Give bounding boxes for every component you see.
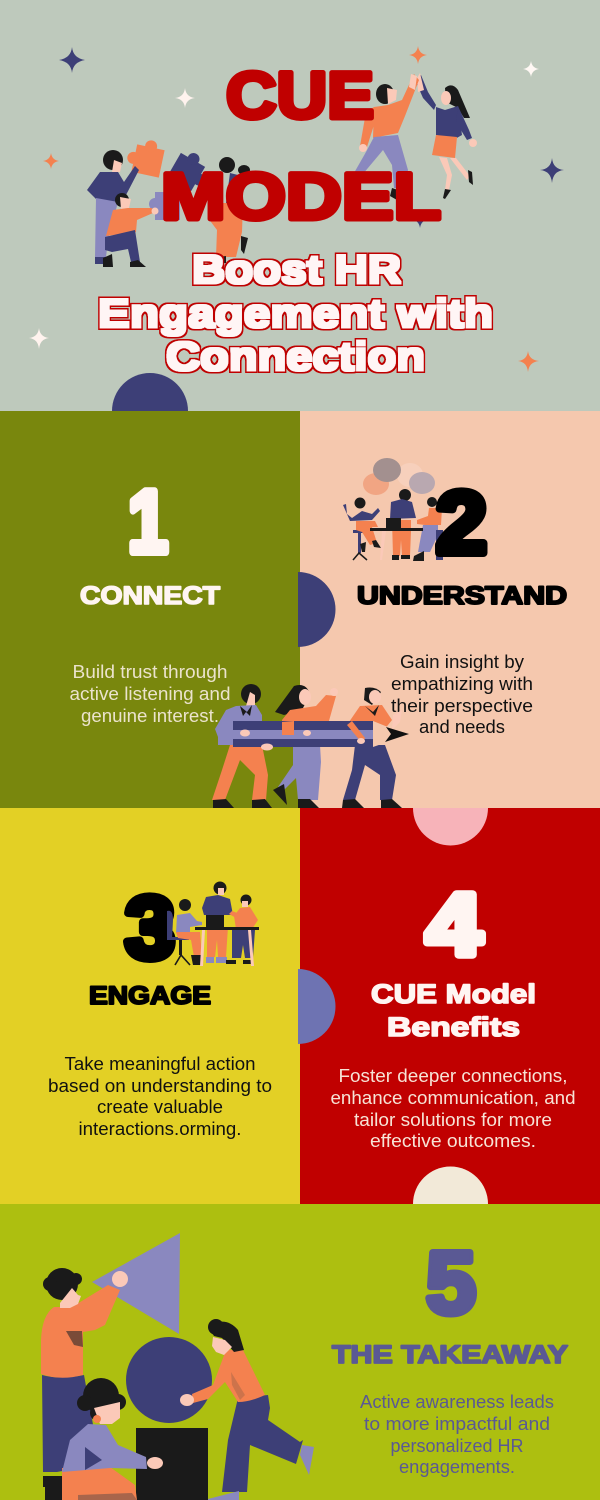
body: takeaway: personalized HR — [390, 1436, 524, 1456]
semicircle: purple divider — [298, 969, 336, 1044]
number 5: 5 — [426, 1233, 476, 1332]
semicircle: pink — [413, 808, 488, 846]
body: engage: interactions.orming. — [78, 1119, 242, 1139]
illustration: people with shapes — [41, 1233, 314, 1500]
illustration: desk meeting — [167, 882, 259, 966]
body: takeaway: to more impactful and — [364, 1414, 550, 1434]
illustration: high five — [350, 73, 477, 200]
heading: understand: UNDERSTAND — [357, 582, 567, 610]
body: understand: Gain insight by — [400, 652, 524, 672]
body: engage: create valuable — [97, 1097, 223, 1117]
heading: engage: ENGAGE — [89, 982, 211, 1010]
body: connect: active listening and — [70, 684, 230, 704]
body: benefits: tailor solutions for more — [354, 1110, 552, 1130]
illustration: puzzle team — [87, 136, 250, 267]
panel: 1 connect — [0, 411, 300, 808]
heading: benefits: Benefits — [387, 1012, 520, 1042]
number 3: 3 — [125, 878, 175, 977]
illustration: meeting with speech bubbles — [343, 458, 449, 561]
panel: 3 engage — [0, 808, 300, 1204]
body: understand: and needs — [419, 717, 505, 737]
title: MODEL: MODEL — [161, 159, 441, 233]
body: engage: based on understanding to — [48, 1076, 272, 1096]
body: connect: Build trust through — [72, 662, 228, 682]
body: takeaway — [360, 1392, 554, 1477]
panel: 5 takeaway — [0, 1204, 600, 1500]
subtitle: Engagement with — [98, 292, 493, 336]
body: takeaway: Active awareness leads — [360, 1392, 554, 1412]
heading: benefits: CUE Model — [371, 979, 536, 1009]
semicircle: header navy — [112, 373, 188, 411]
body: engage — [48, 1054, 272, 1139]
body: benefits: effective outcomes. — [370, 1131, 536, 1151]
body: benefits: enhance communication, and — [330, 1088, 576, 1108]
title: CUE: CUE — [226, 58, 374, 132]
icon: sparkles — [29, 46, 564, 372]
body: understand: their perspective — [391, 696, 533, 716]
body: connect: genuine interest. — [81, 706, 219, 726]
heading: takeaway: THE TAKEAWAY — [332, 1341, 568, 1369]
heading: connect: CONNECT — [80, 582, 220, 610]
body: understand: empathizing with — [391, 674, 533, 694]
body: connect — [70, 662, 230, 726]
heading: benefits — [371, 979, 536, 1042]
panel: 2 understand — [300, 411, 600, 808]
body: understand — [391, 652, 533, 737]
body: benefits: Foster deeper connections, — [338, 1066, 568, 1086]
panel: header — [0, 0, 600, 411]
body: engage: Take meaningful action — [64, 1054, 256, 1074]
subtitle — [98, 248, 493, 379]
subtitle: Connection — [166, 335, 425, 379]
body: takeaway: engagements. — [399, 1457, 515, 1477]
number 1: 1 — [128, 472, 168, 571]
body: benefits — [330, 1066, 576, 1151]
subtitle: Boost HR — [192, 248, 401, 292]
semicircle: navy divider — [298, 572, 336, 647]
panel: 4 benefits — [300, 808, 600, 1204]
number 4: 4 — [426, 875, 482, 974]
illustration: team carrying pencil — [212, 684, 409, 808]
number 2: 2 — [436, 473, 487, 572]
semicircle: cream — [413, 1166, 488, 1204]
